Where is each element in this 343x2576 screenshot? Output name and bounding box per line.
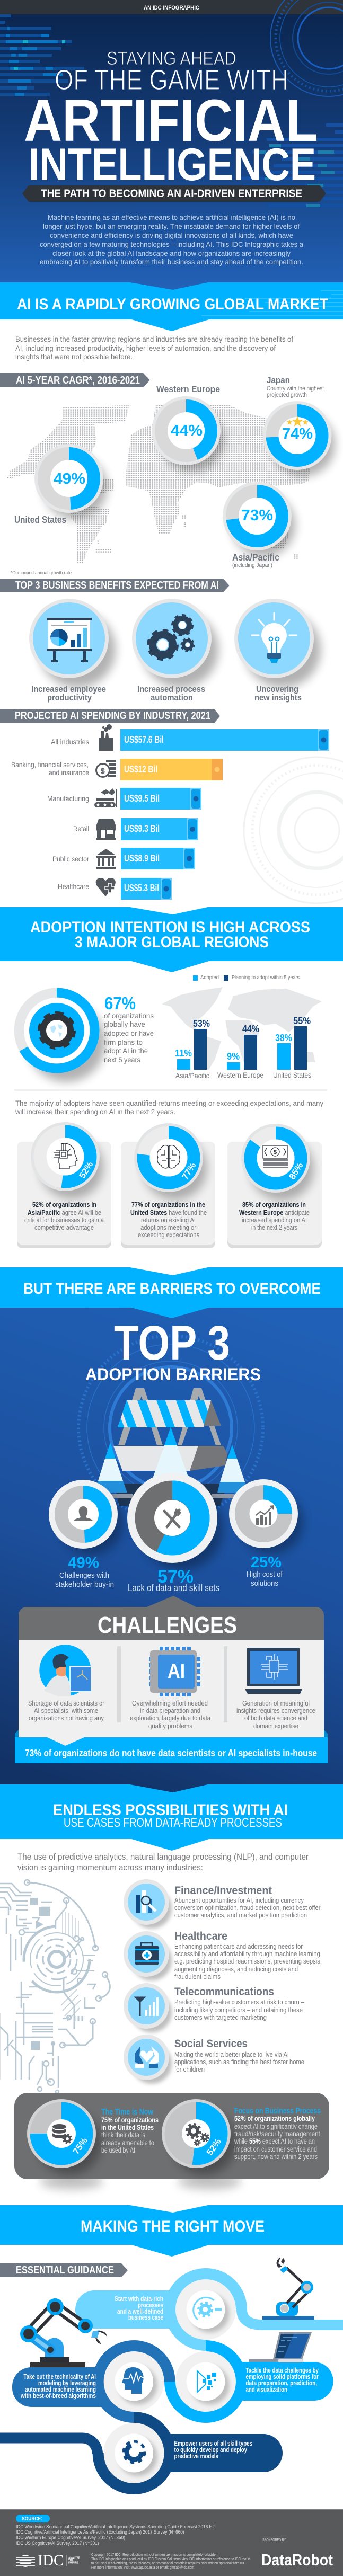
stat text: 67%: adopted or have <box>104 1029 154 1037</box>
card: United States 77%: 77% of organizations in the <box>131 1201 205 1209</box>
donut: United States 49%: 49% <box>54 470 85 487</box>
challenge text columns: Overwhelming effort needed <box>132 1699 208 1707</box>
donut: Japan 74% <box>263 401 335 476</box>
icon: bars and magnifier <box>136 1890 156 1913</box>
donut: Western Europe 44% <box>152 396 224 472</box>
benefit labels: Increased employee <box>31 684 106 694</box>
bar row: all industries: US$57.6 Bil <box>124 734 164 745</box>
use case: healthcare: augmenting diagnoses, and reducing costs and <box>174 1965 298 1973</box>
hero data dashes left <box>0 14 84 96</box>
intro paragraph: closer look at the global AI landscape and how organizations are increasingly <box>52 249 291 257</box>
section banner: adoption intention <box>0 907 343 972</box>
icon: wrench gear <box>124 2441 145 2463</box>
intro paragraph: longer just hype, but an emerging reality. The insatiable demand for higher levels of <box>43 222 300 230</box>
source list: IDC Western Europe Cognitive/AI Survey, 2017 (N=350) <box>16 2535 125 2541</box>
icon: light bulb <box>234 599 321 688</box>
stat text: the time is now: 75% of organizations <box>101 2116 159 2124</box>
icon: robot arm right <box>262 2257 314 2320</box>
sponsor: SPONSORED BY <box>262 2537 286 2542</box>
label: Japan: Country with the highest <box>267 386 324 392</box>
donut: 75% data ready <box>27 2099 101 2175</box>
donut: stakeholder buy-in 49% <box>49 1480 123 1555</box>
card: United States 77% <box>121 1123 215 1248</box>
donut: 52% business process <box>162 2099 236 2175</box>
step: automated machine learning: automated machine learning <box>25 2385 96 2393</box>
step: well-defined business case: Start with data-rich <box>115 2295 163 2303</box>
card: Western Europe 85%: in the next 2 years <box>251 1223 297 1231</box>
icon: rising chart <box>256 1512 271 1525</box>
card: United States 77%: 77% <box>180 1161 198 1182</box>
stat text: 67%: globally have <box>104 1020 145 1028</box>
panel: challenges <box>15 1596 328 1763</box>
use case: healthcare: Enhancing patient care and addressing needs for <box>174 1942 303 1950</box>
bar chart: adoption by region: 9% <box>227 1051 240 1062</box>
icon: data scientist <box>39 1645 91 1696</box>
section banner: endless possibilities <box>0 1784 343 1851</box>
use case: finance: Abundant opportunities for AI, including currency <box>174 1896 304 1904</box>
icon: gears <box>132 599 218 688</box>
stat text: 67%: 67% <box>104 993 136 1013</box>
barrier stats <box>55 1554 283 1593</box>
card: Western Europe 85% <box>227 1124 322 1248</box>
use case: social services: applications, such as finding the best foster home <box>174 2058 304 2066</box>
bar row: banking: US$12 Bil <box>124 764 157 775</box>
challenge text columns: quality problems <box>148 1722 192 1730</box>
benefit labels: Uncovering <box>256 684 298 694</box>
footnote: CAGR: *Compound annual growth rate <box>11 570 72 576</box>
challenge text columns: Shortage of data scientists or <box>28 1699 105 1707</box>
use case intro paragraph: vision is gaining momentum across many industries: <box>17 1862 203 1872</box>
stat text: focus on business process <box>234 2107 322 2161</box>
card: Asia/Pacific 52% <box>17 1122 111 1248</box>
use case: telecommunications: Telecommunications <box>174 1986 274 1998</box>
barrier stats: 49% <box>68 1555 99 1571</box>
icon: data cubes <box>197 2371 216 2392</box>
source list: IDC Worldwide Semiannual Cognitive/Artificial Intelligence Systems Spending Guide Forecast 2016 H2 <box>16 2524 215 2530</box>
challenge text columns: of both data science and <box>244 1714 307 1722</box>
barrier stats: Challenges with <box>59 1571 109 1580</box>
intro paragraph: convenience and efficiency is driving digital innovations of all kinds, which have <box>50 231 293 239</box>
benefit labels: new insights <box>254 692 302 703</box>
section banner: barriers to overcome <box>0 1267 343 1318</box>
panel: footer <box>0 2509 343 2576</box>
use case: social services <box>124 2035 304 2084</box>
stat text: focus on business process: impact on customer service and <box>234 2145 317 2153</box>
use case: healthcare <box>124 1930 322 1980</box>
decorative tech rings background <box>244 757 343 903</box>
card: Western Europe 85%: 85% <box>287 1161 305 1182</box>
barrier stats: 57% <box>157 1567 194 1587</box>
heading: top 3 adoption barriers: TOP 3 <box>114 1316 230 1370</box>
barrier stats: 25% <box>251 1554 282 1571</box>
card: United States 77%: returns on existing AI <box>141 1216 196 1224</box>
bar row: public sector: US$8.9 Bil <box>124 853 160 864</box>
donut: Japan 74%: 74% <box>282 425 313 442</box>
card: United States 77%: adoptions meeting or <box>140 1223 197 1231</box>
adopters paragraph <box>15 1099 323 1116</box>
adopters paragraph: will increase their spending on AI in the next 2 years. <box>15 1107 175 1116</box>
sponsor: DataRobot <box>261 2551 333 2569</box>
icon: barricade and cones <box>94 1388 248 1506</box>
use case intro paragraph <box>17 1852 309 1872</box>
flow: guidance path <box>0 2268 343 2494</box>
section banner: making the right move <box>0 2205 343 2257</box>
title line: of the game with: OF THE GAME WITH <box>55 64 288 96</box>
barrier stats: solutions <box>251 1579 278 1588</box>
bar chart: adoption by region: United States <box>273 1071 311 1079</box>
step: well-defined business case: business case <box>128 2313 163 2321</box>
use case: healthcare: Healthcare <box>174 1930 227 1942</box>
copyright notice: Copyright 2017 IDC. Reproduction without written permission is completely forbidden. <box>91 2552 218 2557</box>
panel: challenges: CHALLENGES <box>98 1612 237 1638</box>
card: United States 77%: exceeding expectations <box>138 1231 199 1239</box>
bar row: healthcare <box>58 878 172 900</box>
step: well-defined business case: and a well-defined <box>117 2307 163 2315</box>
chart legend: Planning to adopt within 5 years <box>232 974 300 981</box>
bar row: all industries <box>51 724 329 751</box>
icon: AI head <box>54 1143 77 1169</box>
benefit labels <box>31 684 302 703</box>
card: Western Europe 85%: 85% of organizations in <box>242 1201 306 1209</box>
copyright notice <box>91 2552 251 2570</box>
bar row: banking: and insurance <box>49 768 89 777</box>
card: Asia/Pacific 52%: Asia/Pacific agree AI will be <box>28 1209 101 1216</box>
bar chart: adoption by region: 53% <box>193 1018 210 1029</box>
label: Western Europe: Western Europe <box>156 384 220 394</box>
illustration: circuit brain <box>0 1880 110 2093</box>
bar chart: adoption by region: 38% <box>275 1033 292 1043</box>
heading: top 3 adoption barriers: ADOPTION BARRIERS <box>85 1365 261 1384</box>
donut: Asia/Pacific 73%: 73% <box>241 507 273 524</box>
card: United States 77%: United States have found the <box>130 1209 207 1216</box>
stat text: focus on business process: while 55% expect AI to have an <box>234 2137 315 2145</box>
stat text: focus on business process: expect AI to significantly change <box>234 2122 318 2130</box>
step: well-defined business case <box>75 2268 343 2351</box>
bar row: public sector <box>52 848 195 869</box>
donut: high cost 25% <box>229 1479 303 1554</box>
chart legend: Adopted <box>200 974 219 981</box>
bar chart: adoption by region: Asia/Pacific <box>175 1071 209 1080</box>
use case: social services: Social Services <box>174 2038 248 2050</box>
bar row: all industries: All industries <box>51 738 89 746</box>
icon: AI chip <box>149 1647 200 1696</box>
tag: AI spending heading <box>0 709 220 723</box>
benefit labels: productivity <box>47 692 92 703</box>
challenge text columns <box>28 1699 315 1730</box>
source pill: SOURCE: <box>22 2516 42 2522</box>
use case: finance: Finance/Investment <box>174 1885 272 1897</box>
stat text: the time is now: be used by AI <box>101 2146 135 2154</box>
step: automated machine learning: modeling by leveraging <box>38 2379 96 2387</box>
stat text: focus on business process: support, now and within 2 years <box>234 2152 318 2161</box>
bar chart: adoption by region: 44% <box>242 1024 259 1034</box>
market intro text: insights that were not possible before. <box>15 352 133 361</box>
tag: essential guidance: ESSENTIAL GUIDANCE <box>16 2264 114 2276</box>
subtitle ribbon <box>22 185 326 202</box>
stat text: the time is now: think their data is <box>101 2130 145 2139</box>
world map background <box>162 987 322 1070</box>
benefit labels: Increased process <box>137 684 205 694</box>
label: Japan: projected growth <box>267 392 307 398</box>
IDC logo <box>16 2552 81 2569</box>
dotted world map <box>6 405 310 563</box>
step: automated machine learning <box>12 2340 175 2423</box>
card: Asia/Pacific 52%: competitive advantage <box>34 1223 94 1231</box>
challenge text columns: insights requires convergence <box>236 1707 315 1715</box>
bar row: manufacturing: US$9.5 Bil <box>124 793 160 804</box>
icon: brain <box>157 1145 180 1168</box>
label: Asia/Pacific: Asia/Pacific <box>232 552 279 563</box>
tag: business benefits heading <box>0 579 229 592</box>
use case: social services: for children <box>174 2065 205 2073</box>
icon: antenna and signal bars <box>136 1997 159 2016</box>
section banner: endless possibilities: USE CASES FROM DATA-READY PROCESSES <box>64 1816 282 1830</box>
use case: healthcare: e.g. predicting hospital readmissions, preventing sepsis, <box>174 1957 322 1965</box>
use case: telecommunications: including likely competitors – and retaining these <box>174 2006 303 2014</box>
card: Western Europe 85%: $ <box>274 1149 277 1156</box>
icon: laptop <box>249 2332 312 2362</box>
section banner: endless possibilities: ENDLESS POSSIBILITIES WITH AI <box>53 1801 288 1819</box>
source list <box>16 2524 215 2546</box>
section banner: adoption intention: 3 MAJOR GLOBAL REGIONS <box>75 934 269 951</box>
section banner: global market <box>0 282 343 331</box>
card: Asia/Pacific 52%: critical for businesses to gain a <box>24 1216 104 1224</box>
IDC logo: ANALYZE <box>68 2557 81 2560</box>
donut: data and skills 57% <box>127 1473 223 1570</box>
hero data dashes right <box>239 123 343 207</box>
heading: top 3 adoption barriers <box>85 1316 261 1384</box>
source list: IDC US Cognitive/AI Survey, 2017 (N=301) <box>16 2541 99 2546</box>
bar row: manufacturing: Manufacturing <box>47 794 89 803</box>
icon: gears <box>187 2124 209 2146</box>
use case: finance <box>124 1879 322 1929</box>
sponsor <box>261 2537 333 2569</box>
bar chart: adoption by region: 11% <box>175 1048 192 1059</box>
use case intro paragraph: The use of predictive analytics, natural language processing (NLP), and computer <box>17 1852 309 1862</box>
donut: United States 49% <box>34 444 107 519</box>
tag: CAGR heading <box>0 373 150 387</box>
step: data platforms: Tackle the data challenges by <box>246 2366 319 2374</box>
copyright notice: This IDC Infographic was produced by IDC Custom Solutions. Any IDC information or reference to IDC that is <box>91 2556 251 2561</box>
donut: 75% data ready: 75% <box>71 2136 90 2156</box>
benefit labels: automation <box>151 692 193 703</box>
challenge text columns: organizations not having any <box>29 1714 104 1722</box>
card: Western Europe 85%: increased spending on AI <box>242 1216 307 1224</box>
bar row: banking <box>11 759 223 780</box>
source pill <box>16 2515 50 2522</box>
label: Asia/Pacific: (including Japan) <box>232 562 272 569</box>
copyright notice: For more information, visit: www.ap.idc.asia or email: gmsap@idc.com <box>91 2565 194 2570</box>
barrier stats: High cost of <box>247 1570 283 1579</box>
intro paragraph: embracing AI to positively transform their business and stay ahead of the competition. <box>40 257 303 266</box>
stat text: the time is now: in the United States <box>101 2123 154 2131</box>
icon: hands and heart <box>135 2046 159 2068</box>
stat text: 67% <box>104 993 154 1064</box>
use case: telecommunications <box>124 1983 305 2032</box>
label: United States: United States <box>14 514 66 525</box>
section banner: making the right move: MAKING THE RIGHT MOVE <box>81 2218 265 2235</box>
step: data platforms <box>164 2340 333 2423</box>
bar chart: spending by industry <box>11 724 329 900</box>
step: data platforms: employing solid platforms for <box>246 2373 319 2380</box>
donut: 52% business process: 52% <box>205 2137 223 2157</box>
challenge text columns: exploration, largely due to data <box>130 1714 211 1722</box>
icon: robot arm left <box>20 2298 107 2367</box>
use case: telecommunications: customers with targeted marketing <box>174 2013 267 2021</box>
bar row: banking: Banking, financial services, <box>11 760 89 769</box>
shadow under dark panel left <box>40 2174 103 2189</box>
market intro text <box>15 335 293 361</box>
stat text: the time is now: The Time is Now <box>101 2108 153 2117</box>
tag: CAGR heading: AI 5-YEAR CAGR*, 2016-2021 <box>16 375 140 386</box>
market intro text: Businesses in the faster growing regions and industries are already reaping the benefits of <box>15 335 293 343</box>
panel: adoption barriers <box>0 1308 343 1792</box>
step: empower users: Empower users of all skill types <box>174 2439 252 2447</box>
step: well-defined business case: processes <box>138 2301 163 2309</box>
use case: healthcare: accessibility and affordability through machine learning, <box>174 1950 322 1958</box>
label: Japan <box>267 375 324 398</box>
icon: head with waveform <box>122 2367 144 2394</box>
use case: finance: customer analytics, and market position prediction <box>174 1911 307 1919</box>
use case: healthcare: fraudulent claims <box>174 1973 221 1980</box>
IDC logo: THE <box>68 2559 74 2562</box>
donut: 67% adoption with gear globe <box>14 988 105 1082</box>
chart legend <box>193 974 300 981</box>
step: automated machine learning: Take out the technicality of AI <box>23 2373 96 2380</box>
step: automated machine learning: with best-of-breed algorithms <box>20 2392 96 2400</box>
step: empower users: to quickly develop and deploy <box>174 2446 248 2454</box>
stat text: 67%: next 5 years <box>104 1055 140 1064</box>
icon: gear cycle arrow <box>194 2297 222 2320</box>
step: empower users <box>0 2412 283 2494</box>
donut: Asia/Pacific 73% <box>223 482 295 557</box>
IDC logo: IDC <box>38 2552 64 2569</box>
challenge text columns: AI specialists, with some <box>34 1707 98 1715</box>
top bar <box>0 0 343 14</box>
card: Asia/Pacific 52%: 52% <box>77 1160 95 1180</box>
top bar label: AN IDC INFOGRAPHIC <box>144 5 199 11</box>
label: Asia/Pacific <box>232 552 279 569</box>
stat text: 67%: adopt AI in the <box>104 1046 148 1055</box>
card: Western Europe 85%: Western Europe anticipate <box>239 1209 310 1216</box>
challenge text columns: Generation of meaningful <box>242 1699 310 1707</box>
card: Asia/Pacific 52%: 52% of organizations in <box>32 1201 96 1209</box>
icon: stars <box>286 416 309 427</box>
intro paragraph: converged on a few maturing technologies – including AI. This IDC Infographic takes a <box>40 240 303 248</box>
icon: people <box>74 1506 93 1521</box>
challenge text columns: domain expertise <box>253 1722 298 1730</box>
bar row: public sector: Public sector <box>52 855 89 863</box>
step: empower users: predictive models <box>174 2452 218 2460</box>
icon: presentation board <box>29 599 116 688</box>
barrier stats: stakeholder buy-in <box>55 1580 114 1589</box>
source list: IDC Cognitive/Artificial Intelligence Asia/Pacific (Excluding Japan) 2017 Survey (N=660) <box>16 2529 184 2535</box>
stat text: 67%: of organizations <box>104 1011 154 1020</box>
bar row: banking: $ <box>101 767 105 776</box>
hero tech rings <box>270 0 343 96</box>
use case: telecommunications: Predicting high-value customers at risk to churn – <box>174 1998 305 2006</box>
bar chart: adoption by region: 55% <box>293 1016 311 1026</box>
title line: staying ahead: STAYING AHEAD <box>107 48 236 69</box>
bar chart: adoption by region <box>171 1016 318 1080</box>
stat text: focus on business process: fraud/risk/security management, <box>234 2129 322 2138</box>
tech rings behind barricade <box>78 1336 263 1520</box>
step: data platforms: data preparation, prediction, <box>246 2379 317 2387</box>
icon: wrench and screwdriver <box>164 1510 179 1527</box>
adopters paragraph: The majority of adopters have seen quantified returns meeting or exceeding expectations, and many <box>15 1099 323 1107</box>
subtitle ribbon: THE PATH TO BECOMING AN AI-DRIVEN ENTERPRISE <box>41 188 302 200</box>
label: Japan: Japan <box>267 375 290 385</box>
use case: finance: conversion optimization, fraud detection, next best offer, <box>174 1904 322 1912</box>
donut: Western Europe 44%: 44% <box>171 422 203 439</box>
bar row: healthcare: US$5.3 Bil <box>124 883 159 893</box>
tag: AI spending heading: PROJECTED AI SPENDING BY INDUSTRY, 2021 <box>15 710 210 722</box>
panel: data readiness stats <box>14 2093 329 2179</box>
shadow under dark panel right <box>178 2174 241 2189</box>
panel: hero <box>0 0 343 290</box>
market intro text: AI, including increased productivity, higher levels of automation, and the discovery of <box>15 344 276 352</box>
icon: laptop with chip <box>245 1648 302 1694</box>
bar row: retail: US$9.3 Bil <box>124 823 160 834</box>
intro paragraph <box>40 213 303 266</box>
bar row: healthcare: Healthcare <box>58 882 89 891</box>
bar row: retail: Retail <box>73 824 89 833</box>
IDC logo: FUTURE <box>68 2561 79 2564</box>
bar chart: adoption by region: Western Europe <box>217 1071 263 1079</box>
title <box>24 48 318 190</box>
challenge text columns: in data preparation and <box>140 1707 200 1715</box>
step: data platforms: and visualization <box>246 2385 287 2393</box>
bar row: manufacturing <box>47 788 201 810</box>
stat text: focus on business process: 52% of organizations globally <box>234 2114 315 2122</box>
icon: AI chip: AI <box>168 1660 185 1683</box>
tag: business benefits heading: TOP 3 BUSINESS BENEFITS EXPECTED FROM AI <box>15 580 219 591</box>
icon: medical case <box>135 1943 159 1965</box>
icon: database with gear <box>52 2124 72 2143</box>
copyright notice: to be used in advertising, press releases, or promotional materials requires prior written approval from IDC. <box>91 2561 247 2565</box>
barrier stats: Lack of data and skill sets <box>128 1583 219 1593</box>
stat text: the time is now <box>101 2108 159 2154</box>
bar row: retail <box>73 818 198 840</box>
stat text: 67%: firm plans to <box>104 1038 143 1046</box>
intro paragraph: Machine learning as an effective means to achieve artificial intelligence (AI) is no <box>48 213 295 221</box>
use case: social services: Making the world a better place to live via AI <box>174 2050 289 2058</box>
stat text: the time is now: already amenable to <box>101 2138 154 2147</box>
section banner: adoption intention: ADOPTION INTENTION IS HIGH ACROSS <box>30 919 310 936</box>
icon: banknotes <box>263 1145 288 1167</box>
